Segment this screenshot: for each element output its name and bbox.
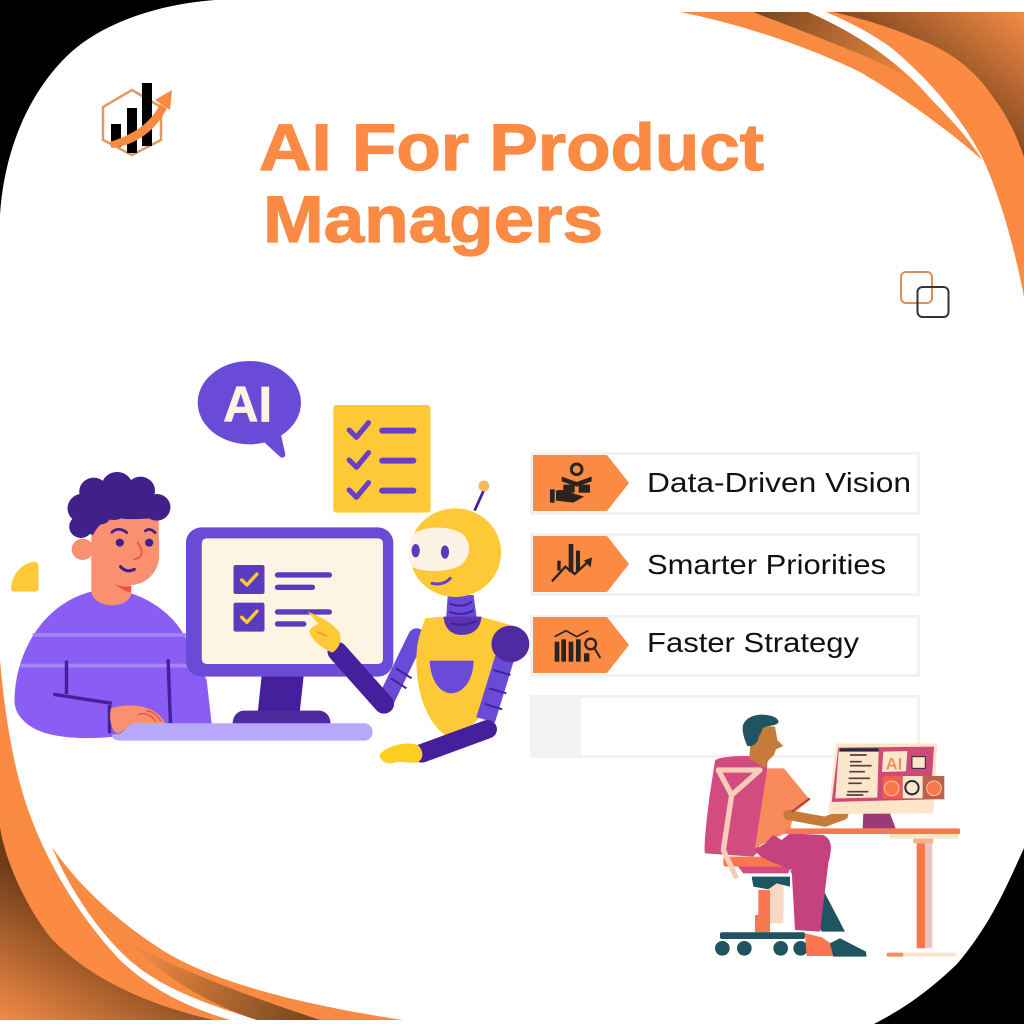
row 1: Data-Driven Vision — [532, 454, 918, 514]
black corner top-left — [0, 0, 215, 215]
icon: bar chart with rising arrow — [552, 544, 592, 581]
monitor — [186, 527, 393, 725]
robot — [308, 481, 529, 763]
computer screen — [828, 743, 944, 828]
desk bar — [112, 723, 373, 741]
speech bubble: AI: AI — [223, 376, 272, 432]
row 3: Faster Strategy — [532, 616, 918, 676]
person sweater — [14, 592, 212, 738]
yellow accent shape — [11, 562, 39, 592]
desk — [785, 828, 960, 957]
title: AI For Product — [259, 110, 764, 184]
decorative swoosh top-right — [680, 12, 1024, 297]
person head — [68, 472, 170, 605]
title: Managers — [263, 182, 603, 256]
row 3: Faster Strategy: Faster Strategy — [647, 627, 859, 658]
speech bubble: AI — [198, 361, 301, 458]
row 2: Smarter Priorities — [532, 534, 918, 594]
logo: hexagon with bars and arrow — [103, 83, 172, 155]
black corner bottom-right — [874, 848, 1024, 1024]
row 2: Smarter Priorities: Smarter Priorities — [647, 549, 886, 580]
feature list — [530, 454, 918, 758]
checklist note — [333, 405, 431, 513]
icon: bars, trend line and magnifier — [555, 631, 600, 662]
row 1: Data-Driven Vision: Data-Driven Vision — [647, 467, 911, 498]
illustration: man working at desk — [705, 715, 960, 957]
man — [743, 715, 867, 957]
illustration: person and robot at computer — [11, 361, 529, 763]
title — [259, 110, 764, 256]
icon: hand holding box with gear — [550, 464, 592, 503]
person hand — [110, 706, 165, 733]
decorative swoosh bottom-left — [0, 660, 403, 1020]
icon: overlapping squares — [901, 272, 948, 317]
chair — [705, 756, 808, 956]
computer screen: AI — [886, 754, 902, 773]
row 4: empty row — [530, 695, 918, 758]
